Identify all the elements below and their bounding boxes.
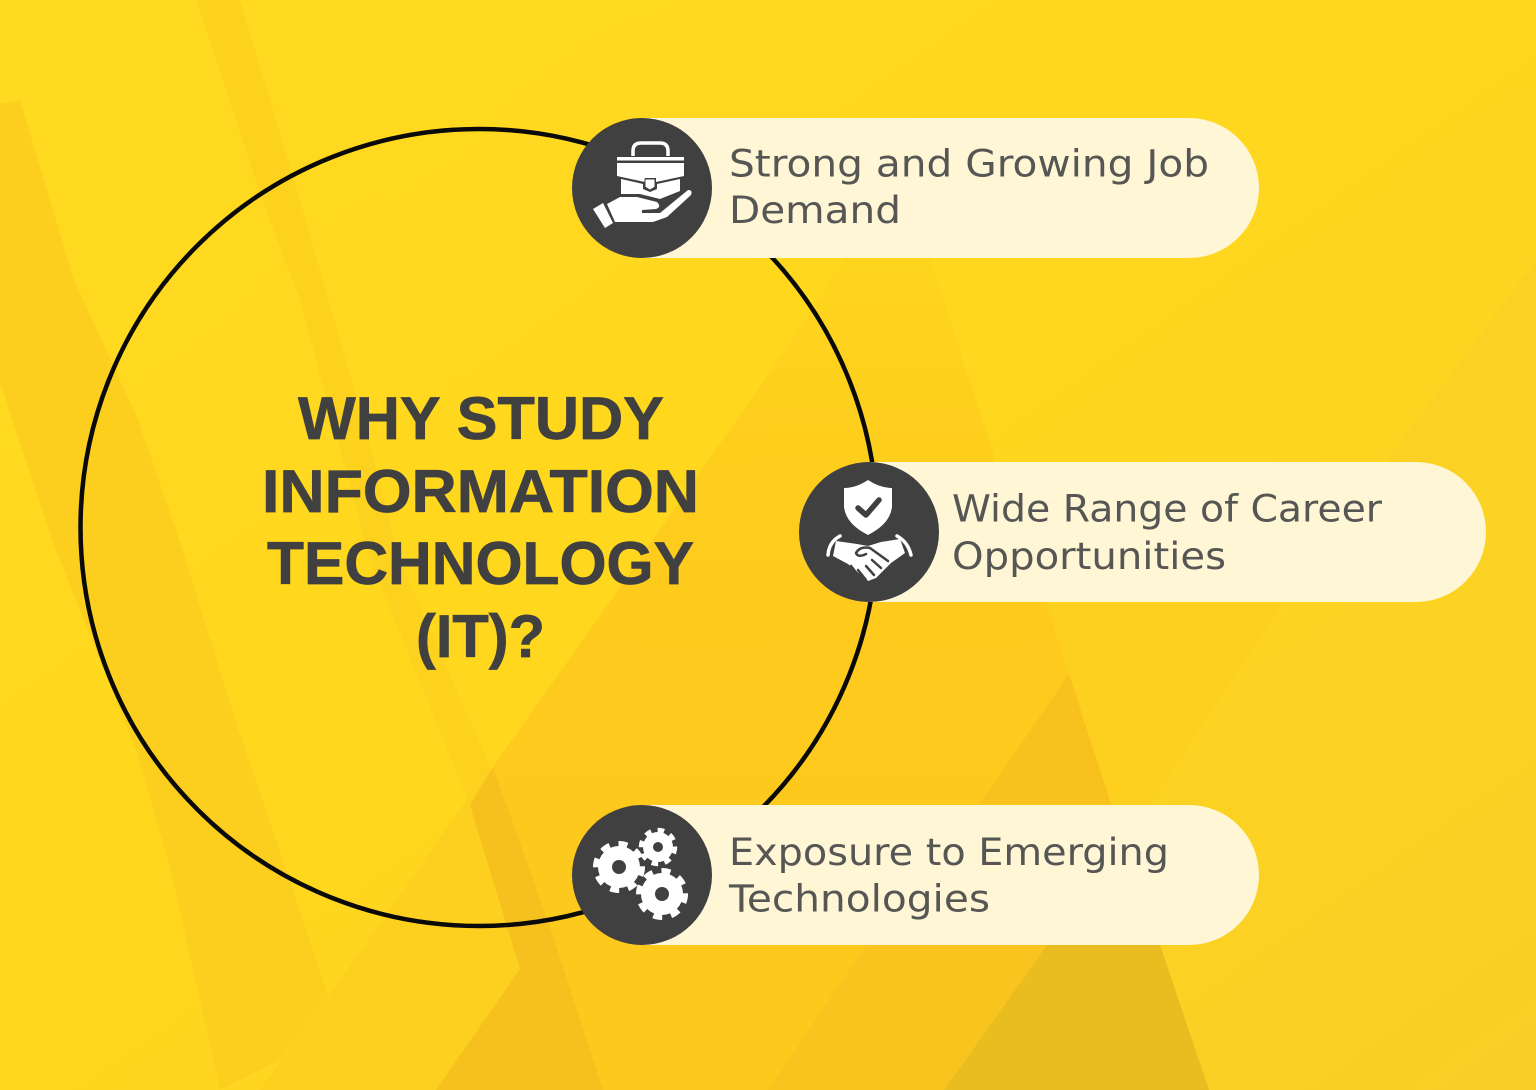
label — [952, 488, 1383, 578]
panel: job demand — [572, 118, 1259, 258]
badge circle — [572, 118, 712, 258]
label: Wide Range of Career — [952, 488, 1383, 530]
icon: briefcase in hand — [593, 143, 692, 228]
label: Demand — [729, 189, 901, 232]
title: (IT)? — [416, 603, 545, 670]
label — [728, 831, 1169, 920]
label: Strong and Growing Job — [729, 142, 1209, 186]
title: TECHNOLOGY — [267, 530, 694, 597]
title: INFORMATION — [262, 458, 699, 525]
badge circle — [572, 805, 712, 945]
large circle outline — [80, 129, 878, 926]
label — [729, 142, 1209, 232]
label: Exposure to Emerging — [729, 831, 1169, 874]
badge circle — [799, 462, 939, 602]
panel: career opportunities — [799, 462, 1486, 602]
icon: shield and handshake — [828, 480, 911, 581]
icon: gears — [596, 830, 685, 917]
panel: emerging technologies — [572, 805, 1259, 945]
label: Opportunities — [952, 535, 1226, 578]
title: WHY STUDY — [298, 385, 664, 452]
pill background — [642, 118, 1259, 258]
pill background — [642, 805, 1259, 945]
pill background — [869, 462, 1486, 602]
label: Technologies — [728, 878, 990, 920]
title — [262, 385, 699, 670]
